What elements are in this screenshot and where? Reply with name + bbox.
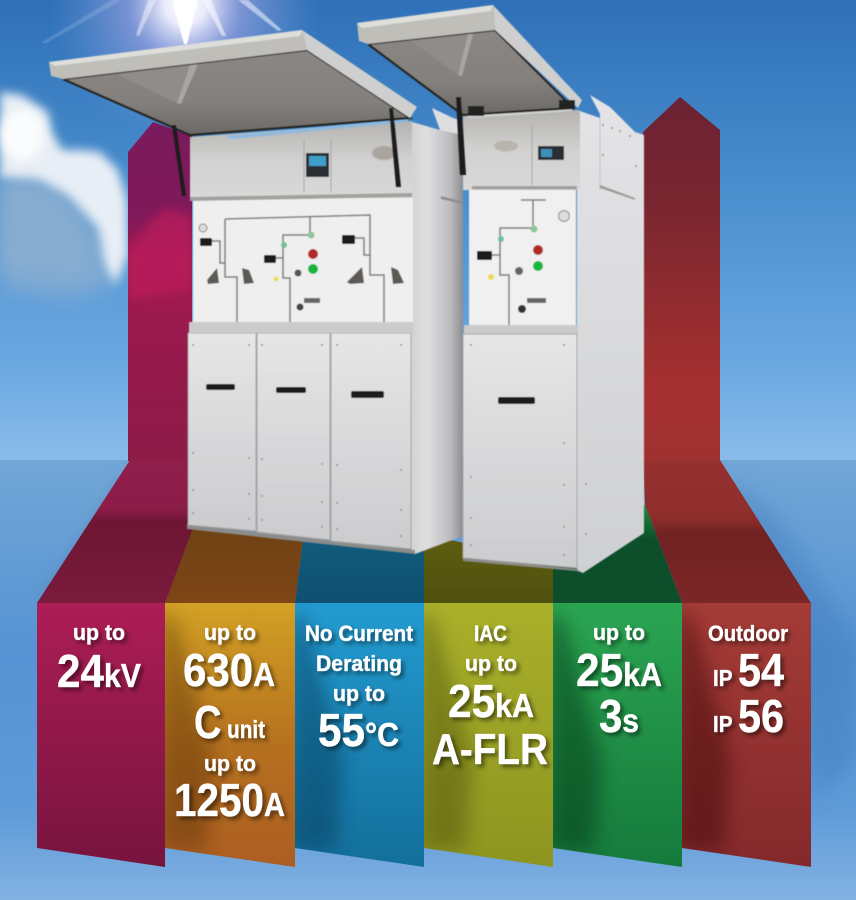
text: up to: up to — [73, 620, 125, 645]
upper seam — [531, 125, 533, 185]
panel: green — [553, 603, 682, 867]
side fold seam — [600, 185, 635, 200]
canopy dark edge — [368, 30, 573, 115]
cloud shaded inner edge — [0, 184, 92, 275]
text: up to: up to — [333, 681, 385, 706]
magenta arrow banner rising on the wall — [128, 122, 192, 461]
door handle — [498, 397, 535, 404]
canopy front lip — [49, 30, 307, 79]
door — [463, 334, 577, 568]
floor: olive — [424, 535, 553, 603]
side fold line — [599, 118, 601, 190]
support strut left — [172, 125, 186, 196]
sky gap under canopy — [466, 108, 572, 118]
fold shadow — [548, 612, 602, 850]
left switchgear cabinet — [187, 108, 463, 554]
canopy right rim — [302, 30, 417, 118]
lip highlight — [357, 5, 493, 28]
text: IP 56: IP 56 — [713, 690, 784, 742]
canopy right rim — [493, 5, 582, 108]
floor: green — [553, 505, 682, 603]
canopy underside — [368, 30, 573, 115]
mimic diagram lines — [484, 200, 546, 326]
panel top rail — [190, 193, 412, 201]
banner 5: 25kA 3s — [548, 603, 682, 867]
right canopy roof — [357, 5, 582, 175]
canopy underside — [63, 50, 410, 135]
text: No Current: No Current — [305, 621, 414, 646]
floor background — [0, 460, 856, 900]
black indicator — [477, 251, 492, 260]
display unit — [306, 153, 329, 177]
panel: olive — [424, 603, 553, 867]
text: up to: up to — [465, 651, 517, 676]
text: 1250A: 1250A — [174, 774, 285, 826]
text: 3s: 3s — [599, 690, 639, 742]
panel: orange — [165, 603, 295, 867]
banner 4: IAC 25kA A-FLR — [419, 603, 553, 867]
banner 2: 630A and 1250A — [160, 603, 295, 867]
cabinet side wall — [577, 95, 644, 573]
text: C unit: C unit — [194, 696, 266, 748]
text: 24kV: 24kV — [57, 645, 141, 697]
floor: blue — [295, 540, 424, 603]
door 1 — [188, 333, 256, 531]
red arrow banner rising on the wall — [643, 97, 720, 461]
clouds — [0, 92, 128, 300]
text: 55°C: 55°C — [318, 704, 399, 756]
banner 3: 55°C — [290, 603, 424, 867]
banner 1: 24kV — [37, 603, 165, 867]
cabinet front upper compartment — [463, 110, 580, 190]
fold shadow — [419, 612, 473, 850]
canopy front lip — [357, 5, 495, 44]
black indicators — [200, 235, 355, 263]
text: up to: up to — [593, 620, 645, 645]
green and red lamps — [199, 224, 320, 310]
control panel — [193, 198, 413, 325]
text: 25kA: 25kA — [448, 675, 534, 727]
side rivets — [585, 124, 637, 535]
text: A-FLR: A-FLR — [432, 725, 548, 774]
display unit — [538, 146, 564, 160]
upper compartment — [190, 121, 412, 198]
underside fold ridge — [458, 34, 473, 76]
door rivets — [470, 344, 565, 556]
cloud shaded body — [0, 170, 118, 300]
support strut right — [389, 108, 401, 187]
fold shadow — [160, 612, 214, 850]
handle slots — [207, 267, 404, 284]
panel: magenta — [37, 603, 165, 867]
hinge blocks — [468, 100, 575, 116]
text: up to: up to — [204, 620, 256, 645]
left canopy roof — [49, 30, 417, 196]
underside lighter centre fold — [410, 34, 468, 75]
floor shadow right of banners — [725, 475, 856, 800]
sun with rays — [42, 0, 320, 140]
panel: blue — [295, 603, 424, 867]
panel: red — [682, 603, 811, 867]
floor: orange — [165, 528, 303, 603]
text: Derating: Derating — [316, 651, 402, 676]
text: IP 54: IP 54 — [713, 644, 784, 696]
vent — [372, 146, 396, 160]
door 3 — [331, 333, 411, 549]
mimic diagram lines — [212, 215, 384, 322]
floor: red — [643, 460, 811, 603]
text: up to: up to — [204, 751, 256, 776]
right switchgear cabinet — [463, 95, 644, 573]
cabinet base — [463, 558, 583, 573]
door rivets — [192, 344, 402, 537]
sky gap under canopy — [225, 119, 408, 139]
fold shadow — [290, 612, 344, 850]
rail between panel and doors — [189, 322, 413, 333]
text: Outdoor: Outdoor — [708, 621, 788, 646]
underside fold ridge — [177, 64, 198, 104]
door 2 — [257, 333, 330, 540]
cloud inner bright patches — [0, 109, 44, 161]
underside lighter centre fold — [115, 65, 190, 103]
upper vent — [494, 140, 518, 152]
banner 6: Outdoor IP54 IP56 — [677, 603, 811, 867]
cloud bright crest — [0, 92, 128, 285]
pink bloom on magenta arrow — [128, 208, 192, 300]
floor shadow left of banner — [35, 470, 130, 600]
receding floor strips — [37, 460, 811, 603]
fold shadow — [677, 612, 731, 850]
floor: magenta — [37, 460, 200, 603]
lamps and gauges — [488, 210, 570, 313]
sky background — [0, 0, 856, 461]
rear flap on side wall — [432, 108, 463, 200]
rail between panel and door — [464, 325, 578, 334]
control panel — [469, 190, 576, 327]
panel top rail — [472, 186, 577, 190]
cabinet base — [187, 524, 415, 554]
text: IAC: IAC — [474, 621, 507, 646]
door handles — [206, 384, 384, 398]
canopy dark edge — [63, 50, 410, 135]
cabinet side wall — [411, 122, 463, 554]
side wall seam — [441, 196, 463, 204]
support strut — [456, 97, 466, 175]
text: 25kA: 25kA — [576, 644, 662, 696]
text: 630A: 630A — [183, 644, 275, 696]
upper compartment seams — [304, 138, 331, 192]
lip highlight — [49, 30, 302, 66]
